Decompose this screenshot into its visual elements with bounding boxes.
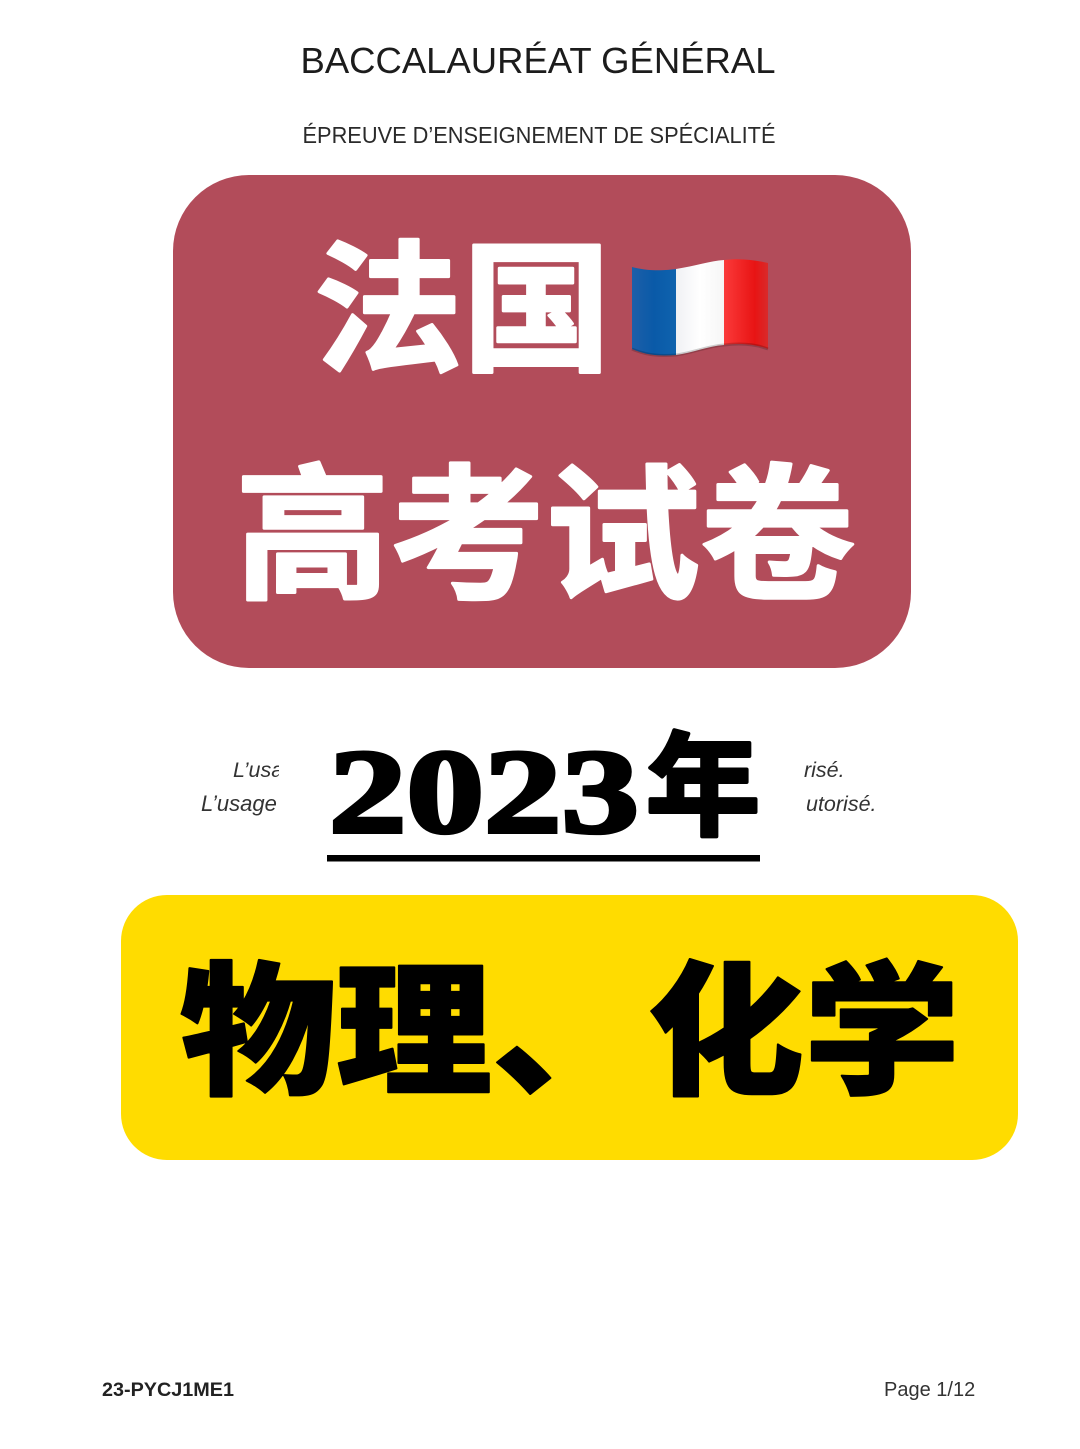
text block: left notice: L’usage	[233, 758, 307, 782]
panel: title card	[173, 175, 911, 668]
heading: baccalaureat general: BACCALAURÉAT GÉNÉRAL	[300, 40, 776, 81]
footer: page number: Page 1/12	[884, 1379, 975, 1401]
text block: right notice: risé.	[804, 758, 845, 782]
text block: right notice: utorisé.	[806, 792, 877, 816]
subjects text: 物理、化学	[180, 953, 960, 1114]
title line 1: 法国	[314, 232, 611, 391]
year heading: 年	[646, 725, 760, 850]
text block: left notice	[201, 755, 309, 820]
title line 2: 高考试卷	[235, 455, 855, 618]
icon: french flag	[632, 259, 768, 355]
subheading: epreuve: ÉPREUVE D’ENSEIGNEMENT DE SPÉCIALITÉ	[302, 122, 776, 148]
panel: subjects	[121, 895, 1018, 1160]
text block: right notice	[804, 758, 877, 816]
text block: left notice: L’usage	[201, 791, 277, 816]
year underline	[327, 855, 760, 862]
footer: code: 23-PYCJ1ME1	[102, 1379, 234, 1401]
year heading	[327, 725, 760, 862]
year heading: 2023	[329, 725, 639, 858]
